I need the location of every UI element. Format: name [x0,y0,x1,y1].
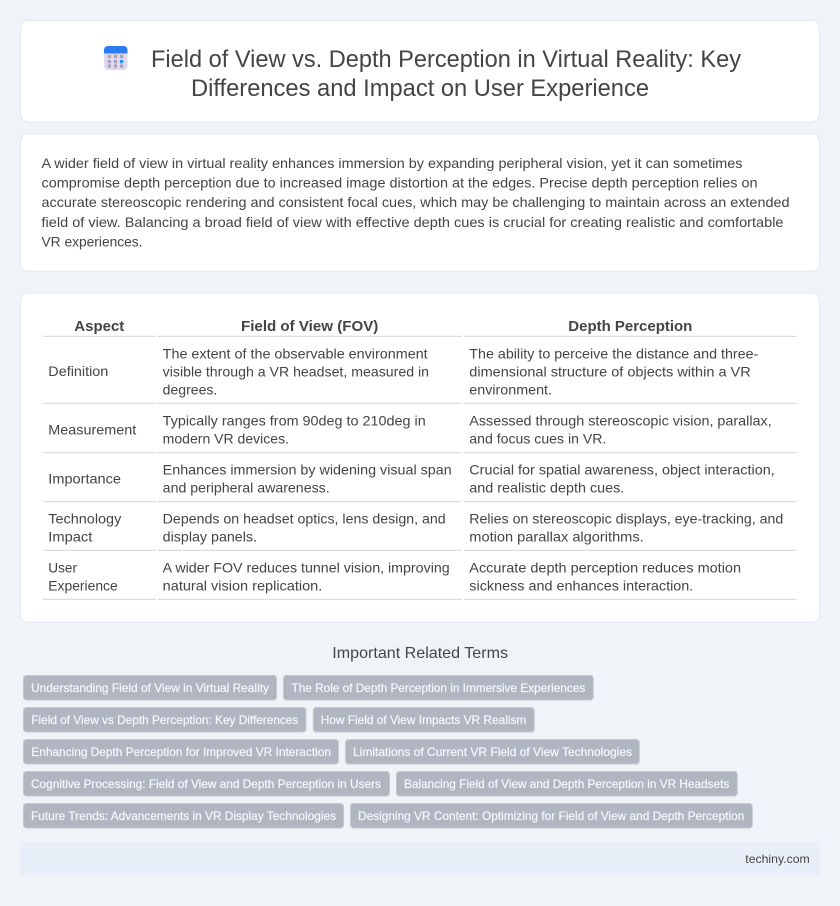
heading: related terms: Important Related Terms [332,645,508,662]
intro text [42,155,790,249]
related terms tags [24,676,752,828]
table row: definition: visible through a VR headset, measured in [163,363,429,379]
panel: header [20,20,820,122]
table row: user experience: sickness and enhances interaction. [469,578,693,594]
tag [284,676,593,700]
tag [313,708,534,732]
tag: Balancing Field of View and Depth Perception in VR Headsets [404,777,729,791]
table row: definition: The extent of the observable environment [163,345,428,361]
tag [24,676,276,700]
tag: How Field of View Impacts VR Realism [321,713,526,727]
table row: technology impact: Impact [48,528,92,544]
table row: measurement: Assessed through stereoscopic vision, parallax, [469,412,772,428]
tag: Future Trends: Advancements in VR Display Technologies [31,809,336,823]
table header [43,319,797,336]
table row: technology impact: motion parallax algorithms. [469,528,644,544]
table row: technology impact [43,510,797,550]
tag: Designing VR Content: Optimizing for Field of View and Depth Perception [358,809,744,823]
tag [350,804,752,828]
tag [24,740,338,764]
tag: Cognitive Processing: Field of View and Depth Perception in Users [31,777,381,791]
tag: The Role of Depth Perception in Immersive Experiences [292,681,585,695]
table row: importance: Importance [48,470,121,486]
intro text: compromise depth perception due to increased image distortion at the edges. Precise depth perception relies on [42,175,758,191]
table row: user experience: Experience [48,578,118,594]
table row: measurement: modern VR devices. [163,430,289,446]
tag: Field of View vs Depth Perception: Key Differences [31,713,298,727]
table row: technology impact: Relies on stereoscopic displays, eye-tracking, and [469,510,783,526]
tag: Limitations of Current VR Field of View Technologies [353,745,632,759]
table row: measurement: Measurement [48,421,136,437]
table header: Aspect [74,319,124,335]
table row: definition [43,345,797,403]
table row: user experience: natural vision replication. [163,578,322,594]
table row: definition: Definition [48,363,108,379]
table row: importance [43,461,797,502]
title [151,46,741,102]
table row: definition: degrees. [163,381,217,397]
table header: Depth Perception [568,319,692,335]
icon: calendar [104,46,128,70]
table row: measurement: Typically ranges from 90deg to 210deg in [163,412,426,428]
table row: importance: and realistic depth cues. [469,479,624,495]
title: Field of View vs. Depth Perception in Virtual Reality: Key [151,46,741,73]
panel: introduction [20,134,820,271]
tag [24,804,344,828]
footer: techiny.com [745,852,810,866]
tag [24,708,306,732]
table row: user experience: Accurate depth perception reduces motion [469,560,741,576]
table row: user experience: User [48,560,77,576]
intro text: field of view. Balancing a broad field of view with effective depth cues is crucial for creating realistic and comfortable [42,214,784,230]
table row: technology impact: display panels. [163,528,257,544]
table row: measurement [43,412,797,453]
panel: comparison table [20,293,820,622]
tag: Enhancing Depth Perception for Improved VR Interaction [31,745,331,759]
table row: importance: and peripheral awareness. [163,479,330,495]
table row: definition: The ability to perceive the distance and three- [469,345,759,361]
intro text: A wider field of view in virtual reality enhances immersion by expanding peripheral vision, yet it can sometimes [42,155,742,171]
tag: Understanding Field of View in Virtual Reality [31,681,269,695]
table row: technology impact: Depends on headset optics, lens design, and [163,510,446,526]
table row: importance: Crucial for spatial awareness, object interaction, [469,461,775,477]
table row: measurement: and focus cues in VR. [469,430,606,446]
tag [346,740,639,764]
table header: Field of View (FOV) [241,319,378,335]
table row: definition: dimensional structure of objects within a VR [469,363,751,379]
footer [20,842,820,876]
table row: definition: environment. [469,381,552,397]
tag [396,772,737,796]
table row: user experience: A wider FOV reduces tunnel vision, improving [163,560,450,576]
table row: user experience [43,560,797,599]
title: Differences and Impact on User Experience [191,75,649,102]
table row: importance: Enhances immersion by widening visual span [163,461,452,477]
table row: technology impact: Technology [48,510,121,526]
tag [24,772,390,796]
intro text: accurate stereoscopic rendering and consistent focal cues, which may be challenging to maintain across an extended [42,194,790,210]
intro text: VR experiences. [42,233,142,249]
